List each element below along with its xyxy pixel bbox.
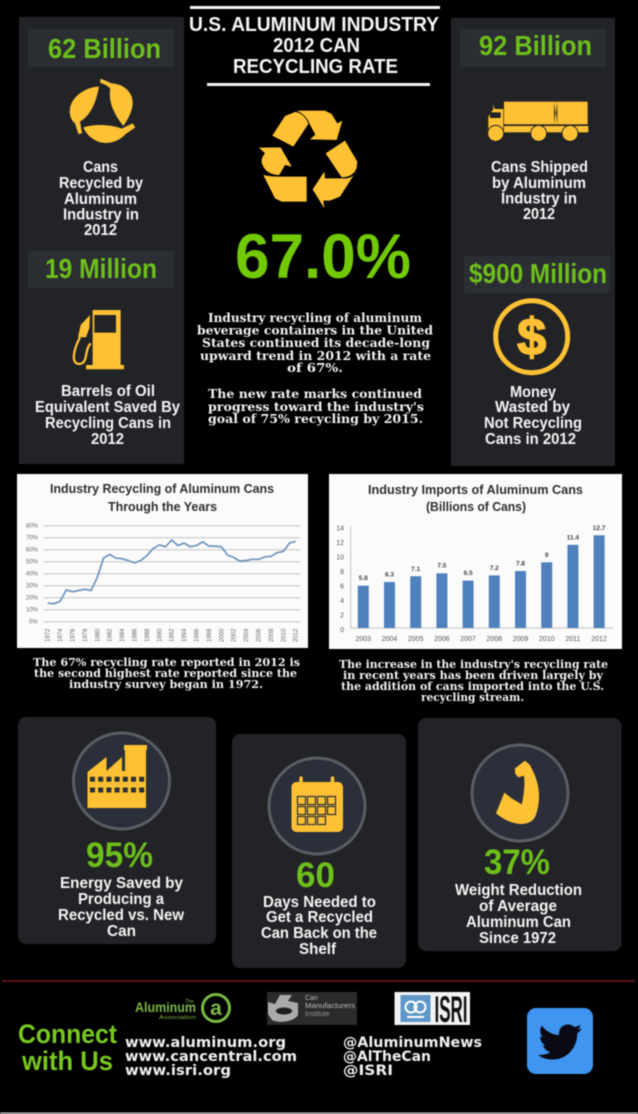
chart: imports of aluminum cans: 7.5: [437, 562, 447, 570]
big stat: 67.0%: 67.0%: [235, 222, 411, 292]
chart: recycling through the years: [17, 474, 308, 648]
logo: can manufacturers institute: [267, 992, 357, 1025]
text: weight reduction: [455, 882, 582, 947]
chart: imports of aluminum cans: 2009: [513, 636, 528, 643]
chart: recycling through the years: 1998: [207, 628, 213, 642]
text: energy saved: Can: [107, 923, 136, 940]
caption: bar chart: in recent years has been driven largely by: [343, 669, 604, 682]
chart: imports of aluminum cans: (Billions of Cans): [426, 500, 526, 514]
chart: recycling through the years: 1982: [108, 628, 114, 642]
heading: connect with us: with Us: [21, 1046, 113, 1076]
chart: imports of aluminum cans: 7.1: [411, 566, 421, 573]
text: ISRI: [434, 989, 468, 1030]
title: U.S. ALUMINUM INDUSTRY: [189, 14, 440, 36]
heading: $900 Million: $900 Million: [469, 258, 607, 289]
text: cans recycled: Recycled by: [59, 175, 143, 192]
chart: imports of aluminum cans: 14: [336, 526, 344, 532]
text: recycling summary: goal of 75% recycling by 2015.: [208, 411, 423, 426]
text: cans recycled: Cans: [83, 159, 118, 176]
text: recycling summary: [197, 310, 433, 426]
logo: aluminum association: [135, 994, 230, 1022]
text: twitter handles: @AluminumNews: [343, 1035, 482, 1051]
chart: imports of aluminum cans: 7.8: [516, 560, 525, 568]
text: cans shipped: [491, 159, 588, 223]
text: weight reduction: of Average: [479, 898, 557, 915]
icon: dollar coin: $: [517, 308, 546, 366]
text: money wasted: Not Recycling: [484, 415, 582, 432]
caption: line chart: the second highest rate reported since the: [34, 667, 297, 680]
text: cans shipped: Cans Shipped: [491, 159, 588, 176]
icon: twitter: [527, 1008, 593, 1074]
chart: recycling through the years: 80%: [26, 524, 39, 530]
chart: recycling through the years: 2008: [269, 628, 275, 642]
chart: recycling through the years: Industry Recycling of Aluminum Cans: [50, 482, 274, 496]
logo: ISRI: [394, 989, 470, 1030]
heading: 62 Billion: [28, 29, 174, 67]
text: twitter handles: @AlTheCan: [343, 1049, 431, 1065]
text: barrels of oil: Recycling Cans in: [45, 415, 171, 432]
caption: bar chart: [339, 658, 608, 704]
text: energy saved: Recycled vs. New: [58, 907, 185, 924]
text: days needed: Get a Recycled: [266, 909, 373, 926]
chart: imports of aluminum cans: 2011: [565, 636, 581, 643]
text: recycling summary: Industry recycling of aluminum: [208, 310, 422, 325]
chart: recycling through the years: 0%: [29, 620, 38, 626]
stat: 60: 60: [296, 856, 335, 895]
text: money wasted: Cans in 2012: [485, 431, 576, 448]
logo: aluminum association: Aluminum: [135, 999, 196, 1015]
icon: dollar coin: [496, 301, 568, 373]
text: weight reduction: Aluminum Can: [466, 914, 571, 931]
chart: recycling through the years: 10%: [26, 608, 39, 614]
chart: imports of aluminum cans: 2007: [460, 636, 476, 643]
chart: recycling through the years: 1988: [145, 628, 151, 642]
text: recycling summary: of 67%.: [287, 360, 343, 375]
chart: imports of aluminum cans: 2010: [539, 636, 555, 643]
title: 2012 CAN: [273, 35, 360, 57]
chart: recycling through the years: 60%: [26, 548, 39, 554]
text: cans recycled: Aluminum: [64, 191, 137, 208]
chart: recycling through the years: Through the Years: [108, 500, 217, 514]
text: recycling summary: States continued its decade-long: [202, 335, 430, 350]
chart: imports of aluminum cans: 6.5: [464, 570, 473, 577]
chart: imports of aluminum cans: 2005: [408, 636, 424, 643]
chart: recycling through the years: 70%: [26, 536, 39, 542]
heading: 92 Billion: [460, 29, 606, 67]
chart: recycling through the years: 2000: [219, 628, 225, 642]
text: cans shipped: 2012: [523, 206, 555, 223]
chart: imports of aluminum cans: 5.8: [359, 575, 368, 582]
text: websites: www.isri.org: [125, 1063, 231, 1079]
caption: line chart: industry survey began in 1972.: [69, 678, 263, 691]
text: barrels of oil: 2012: [91, 431, 124, 448]
chart: imports of aluminum cans: 12: [336, 540, 344, 547]
text: days needed: Can Back on the: [261, 925, 377, 942]
text: recycling summary: beverage containers in the United: [197, 322, 433, 338]
chart: recycling through the years: 2010: [281, 628, 287, 642]
text: websites: www.aluminum.org: [125, 1035, 286, 1051]
chart: recycling through the years: 50%: [26, 560, 39, 566]
chart: recycling through the years: 1990: [157, 628, 163, 642]
stat: 37%: 37%: [484, 843, 550, 882]
heading: 19 Million: 19 Million: [45, 253, 157, 284]
text: cans recycled: Industry in: [63, 206, 139, 224]
text: cans shipped: by Aluminum: [492, 175, 586, 192]
chart: imports of aluminum cans: 10: [336, 554, 344, 562]
chart: imports of aluminum cans: 6.3: [385, 572, 394, 578]
logo: can manufacturers institute: Can: [305, 995, 318, 1002]
chart: imports of aluminum cans: [329, 474, 622, 649]
chart: recycling through the years: 1978: [83, 628, 89, 642]
panel: right stats: [451, 18, 615, 466]
chart: imports of aluminum cans: 2006: [434, 636, 450, 643]
text: cans recycled: [59, 159, 143, 239]
text: weight reduction: Weight Reduction: [455, 882, 582, 899]
chart: imports of aluminum cans: 2004: [382, 636, 397, 643]
text: websites: [125, 1035, 297, 1079]
logo: aluminum association: a: [210, 997, 222, 1020]
caption: bar chart: recycling stream.: [421, 691, 524, 704]
caption: line chart: [33, 656, 300, 691]
text: energy saved: Producing a: [78, 891, 164, 908]
icon: fuel pump: [74, 310, 124, 369]
text: days needed: Shelf: [299, 941, 337, 958]
text: money wasted: Wasted by: [495, 399, 570, 416]
icon: leaves: [70, 79, 135, 143]
chart: recycling through the years: 30%: [26, 584, 39, 590]
heading: connect with us: [18, 1019, 117, 1076]
chart: imports of aluminum cans: 2008: [487, 636, 502, 643]
text: barrels of oil: Barrels of Oil: [61, 383, 155, 400]
icon: factory: [74, 733, 170, 829]
chart: imports of aluminum cans: 11.4: [567, 534, 579, 542]
caption: bar chart: The increase in the industry's recycling rate: [339, 658, 608, 671]
text: weight reduction: Since 1972: [479, 930, 556, 947]
chart: imports of aluminum cans: 2012: [591, 636, 607, 643]
icon: calendar: [269, 758, 365, 854]
heading: 62 Billion: 62 Billion: [48, 33, 161, 64]
chart: recycling through the years: 2006: [256, 628, 262, 642]
chart: recycling through the years: 20%: [26, 596, 39, 602]
text: days needed: Days Needed to: [263, 894, 376, 911]
title: RECYCLING RATE: [233, 56, 398, 78]
caption: line chart: The 67% recycling rate reported in 2012 is: [33, 656, 300, 669]
text: money wasted: Money: [510, 384, 556, 401]
chart: imports of aluminum cans: 8: [340, 569, 344, 576]
text: barrels of oil: Equivalent Saved By: [35, 399, 180, 416]
chart: recycling through the years: 1974: [58, 628, 64, 642]
text: recycling summary: The new rate marks continued: [208, 386, 422, 401]
caption: bar chart: the addition of cans imported into the U.S.: [341, 680, 604, 693]
chart: recycling through the years: 1972: [46, 628, 52, 642]
text: cans shipped: Industry in: [501, 190, 577, 208]
heading: connect with us: Connect: [18, 1019, 117, 1049]
chart: imports of aluminum cans: 6: [340, 584, 344, 591]
card: energy saved: [18, 717, 216, 944]
text: barrels of oil: [35, 383, 180, 448]
chart: recycling through the years: 1986: [132, 628, 138, 642]
text: recycling summary: progress toward the industry's: [208, 399, 424, 414]
chart: recycling through the years: 2012: [294, 628, 300, 642]
text: twitter handles: [343, 1035, 482, 1079]
chart: imports of aluminum cans: 9: [545, 552, 549, 559]
chart: recycling through the years: 40%: [26, 572, 39, 578]
chart: recycling through the years: 1994: [182, 628, 188, 642]
text: energy saved: Energy Saved by: [60, 875, 183, 892]
chart: recycling through the years: 2004: [244, 628, 250, 642]
logo: can manufacturers institute: Manufacturers: [305, 1003, 356, 1010]
heading: 92 Billion: 92 Billion: [479, 30, 592, 61]
chart: imports of aluminum cans: 2: [340, 613, 344, 620]
chart: imports of aluminum cans: 7.2: [490, 565, 499, 572]
card: days to shelf: [232, 734, 406, 968]
logo: aluminum association: Association: [159, 1015, 196, 1021]
title: [189, 6, 440, 86]
icon: flexed arm: [472, 745, 568, 841]
text: days needed: [261, 894, 377, 958]
card: weight reduction: [418, 718, 622, 951]
chart: imports of aluminum cans: 2003: [356, 636, 371, 643]
chart: imports of aluminum cans: Industry Imports of Aluminum Cans: [368, 483, 583, 497]
panel: left stats: [19, 17, 184, 464]
logo: aluminum association: The: [185, 999, 194, 1005]
text: money wasted: [484, 384, 582, 448]
chart: recycling through the years: 1980: [95, 628, 101, 642]
icon: recycle symbol: [259, 111, 357, 208]
chart: imports of aluminum cans: 12.7: [593, 525, 606, 532]
text: energy saved: [58, 875, 185, 940]
text: twitter handles: @ISRI: [343, 1063, 393, 1079]
chart: imports of aluminum cans: 0: [340, 627, 344, 634]
chart: recycling through the years: 1992: [170, 628, 176, 642]
text: websites: www.cancentral.com: [125, 1049, 297, 1065]
chart: recycling through the years: 1996: [194, 628, 200, 642]
text: recycling summary: upward trend in 2012 with a rate: [200, 348, 431, 363]
icon: truck: [488, 102, 588, 141]
stat: 95%: 95%: [86, 836, 153, 875]
chart: recycling through the years: 2002: [232, 628, 238, 642]
chart: recycling through the years: 1976: [70, 628, 76, 642]
text: cans recycled: 2012: [84, 222, 117, 239]
chart: imports of aluminum cans: 4: [340, 598, 344, 605]
chart: recycling through the years: 1984: [120, 628, 126, 642]
logo: can manufacturers institute: Institute: [305, 1011, 330, 1018]
